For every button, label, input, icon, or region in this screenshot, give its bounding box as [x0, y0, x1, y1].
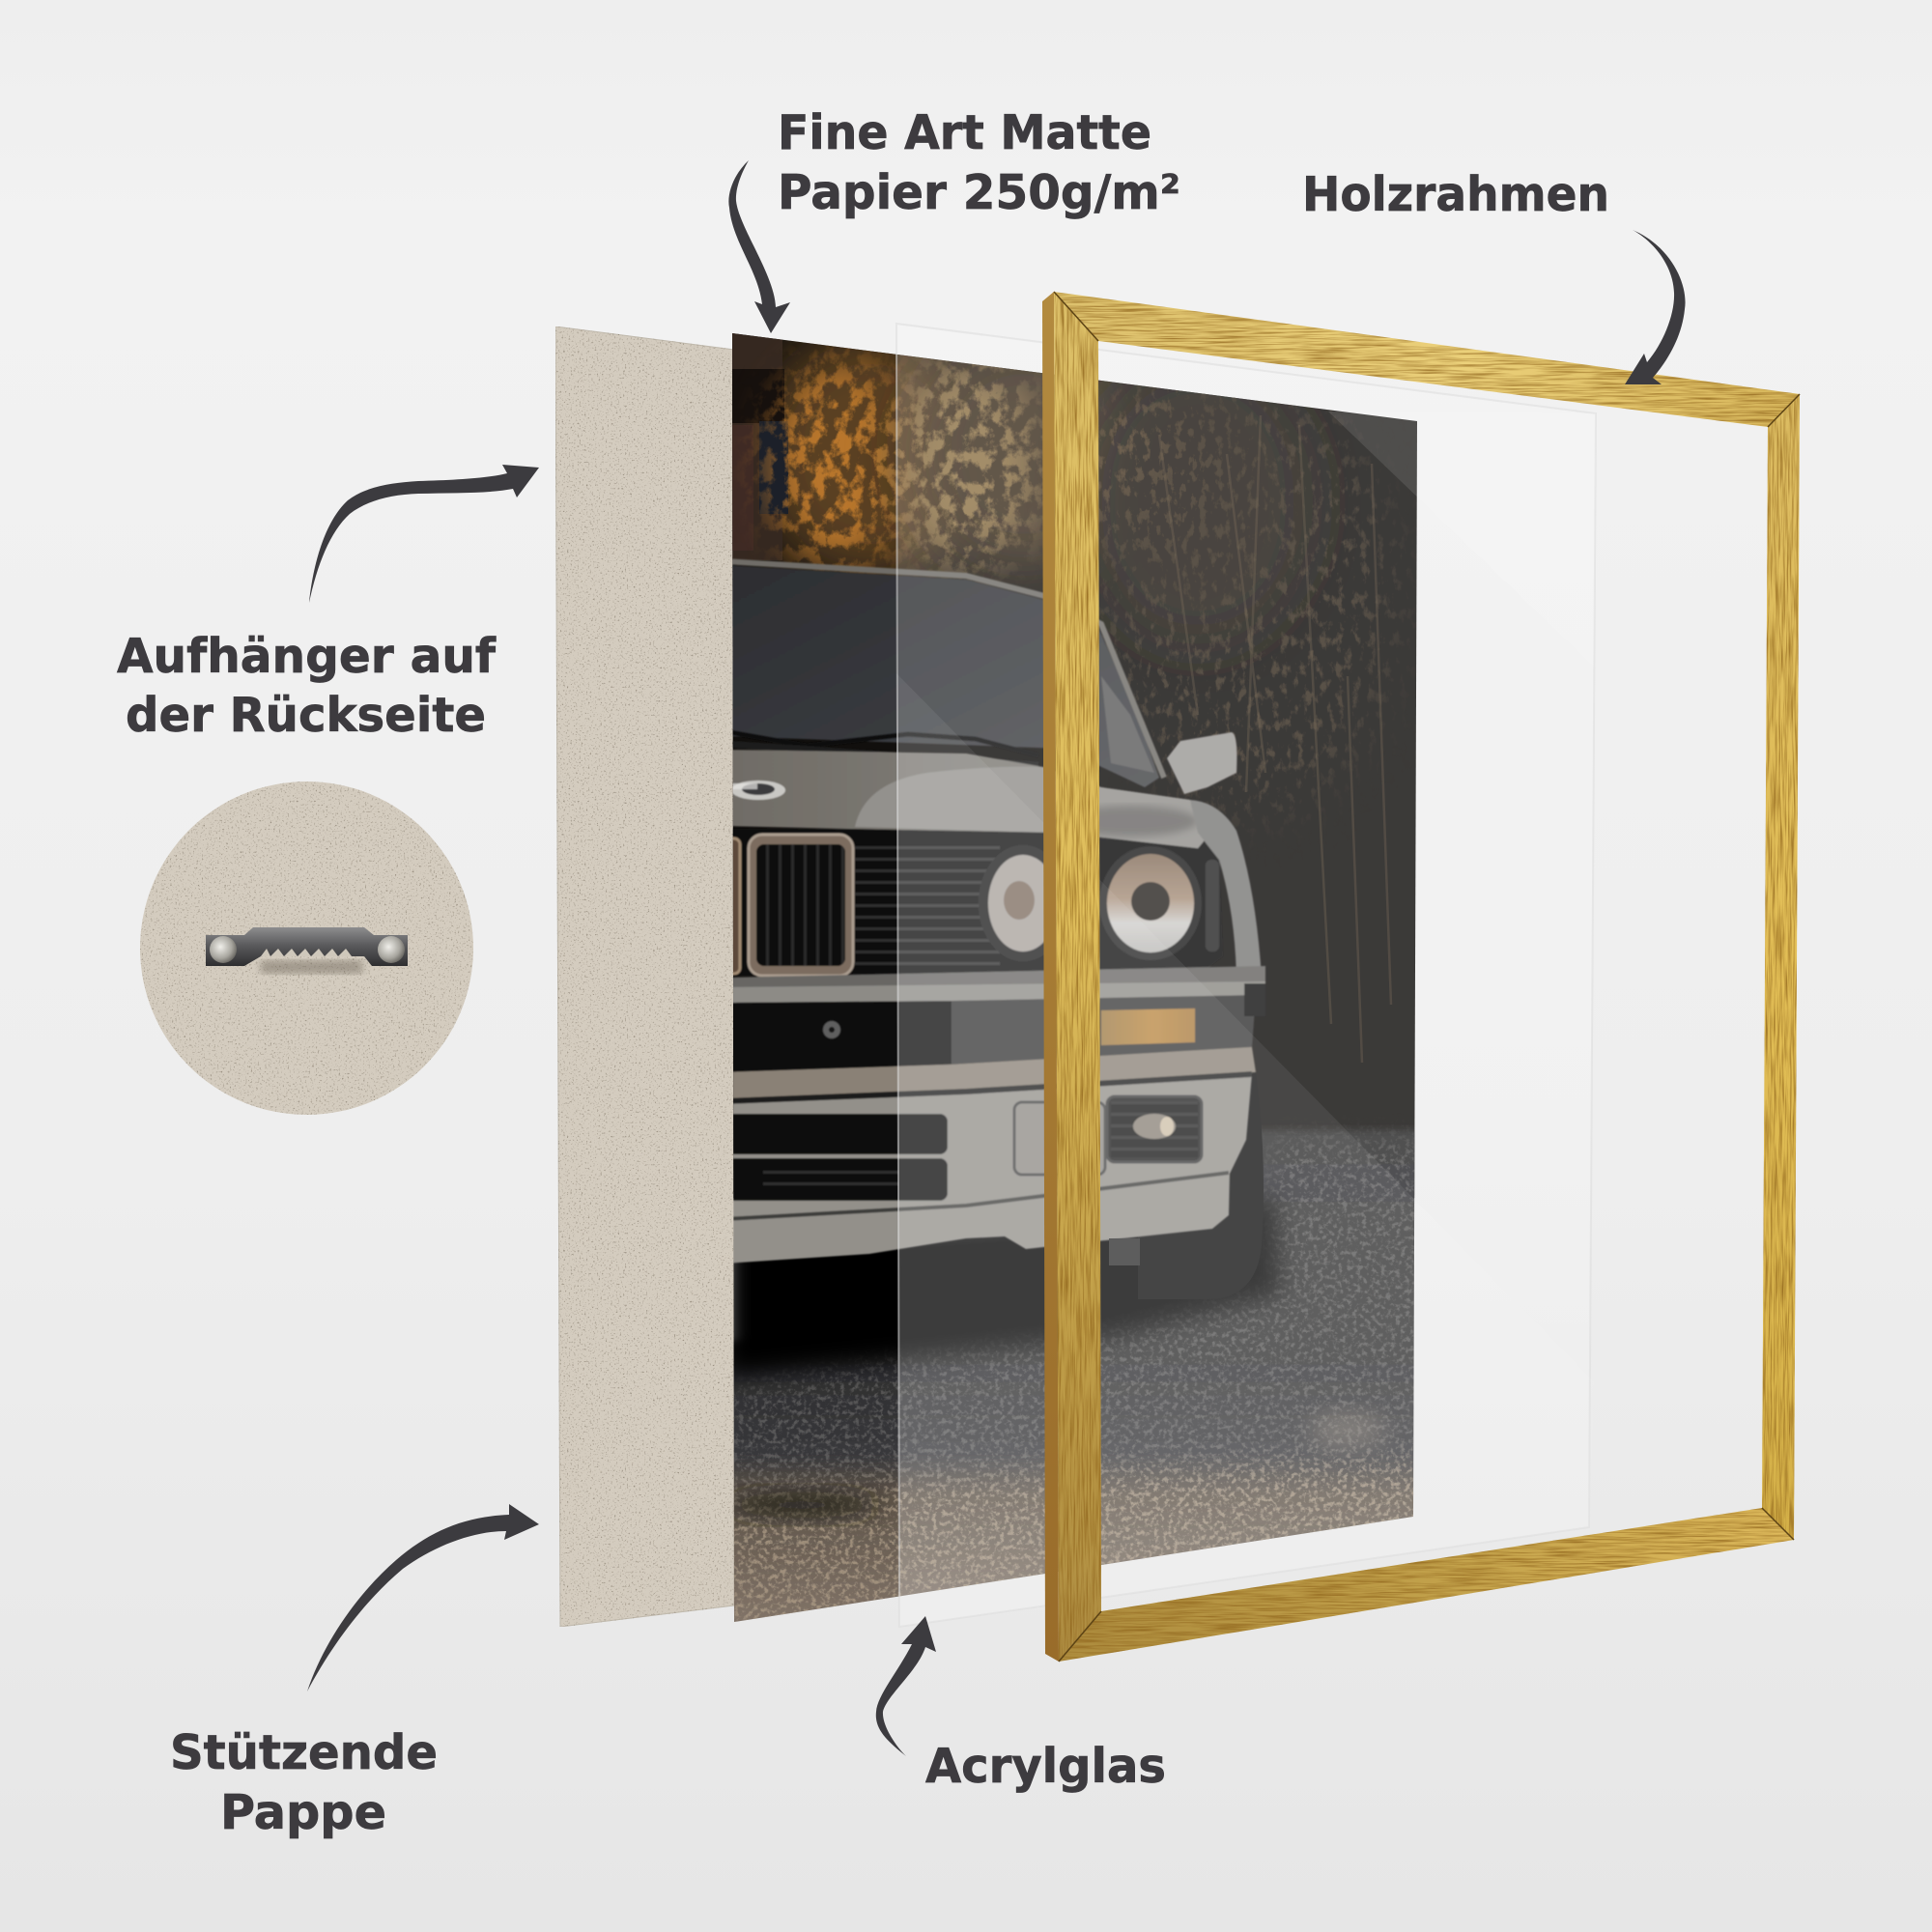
- car: hood: [724, 750, 1208, 848]
- heading: Aufhänger auf der Rückseite: der Rückseite: [126, 688, 486, 743]
- gravel ground: [724, 1130, 1430, 1642]
- car: left kidney grille edge: [732, 836, 743, 976]
- car: black number plate panel: [724, 983, 1265, 1072]
- panel: hanger detail circle: [140, 781, 473, 1115]
- car: fender: [1190, 800, 1262, 987]
- car: plate recess: [1014, 1102, 1105, 1175]
- car: kidney grille: [749, 835, 853, 976]
- frame bottom bar: [1059, 1508, 1794, 1662]
- sawtooth hanger shadow: [261, 960, 362, 974]
- car: inner headlight: [980, 846, 1057, 960]
- frame side face: [1042, 292, 1059, 1662]
- panel: fine art paper poster with car photo: [720, 328, 1430, 1642]
- arrow: to acrylic: [876, 1616, 936, 1756]
- building behind trees: [732, 333, 788, 560]
- glass reflection lower band: [896, 673, 1594, 1627]
- heading: Stützende Pappe: Stützende: [170, 1725, 438, 1780]
- heading: Fine Art Matte Papier: Papier 250g/m²: [778, 165, 1180, 220]
- arrow: to paper: [728, 160, 790, 333]
- panel: gold wooden frame: [1042, 292, 1800, 1662]
- car: orange indicator: [1101, 1009, 1195, 1045]
- frame top bar: [1054, 292, 1800, 427]
- car: chrome bumper strip: [724, 966, 1265, 1005]
- under-car shadow: [724, 1198, 1280, 1377]
- heading: Stützende Pappe: [170, 1725, 438, 1840]
- gravel patch under bumper: [1109, 1238, 1140, 1265]
- car: lower bumper silver: [724, 1074, 1252, 1264]
- arrow: to cardboard: [307, 1504, 539, 1691]
- arrow: to hanger side: [309, 465, 539, 603]
- heading: Fine Art Matte Papier: Fine Art Matte: [778, 105, 1151, 160]
- heading: Aufhänger auf der Rückseite: [117, 629, 497, 743]
- car: BMW badge: [731, 781, 785, 800]
- heading: Acrylglas: Acrylglas: [925, 1739, 1166, 1794]
- cardboard disc: [140, 781, 473, 1115]
- warm underglow behind foliage: [771, 340, 1314, 634]
- car: air intakes: [720, 1114, 948, 1201]
- car: headlight and grille black surround: [724, 829, 1223, 976]
- car: horizontal grille slats: [855, 840, 1000, 971]
- car: upper bumper silver: [724, 1047, 1256, 1099]
- car: side mirror: [1167, 732, 1236, 794]
- bamboo stems: [1159, 415, 1391, 1063]
- car body: [720, 561, 1265, 1264]
- sawtooth hanger plate: [206, 927, 408, 966]
- orange foliage: [771, 362, 1391, 811]
- frame left bar: [1054, 292, 1101, 1662]
- arrow: to frame: [1625, 230, 1686, 384]
- heading: Holzrahmen: Holzrahmen: [1302, 167, 1609, 222]
- heading: Aufhänger auf der Rückseite: Aufhänger auf: [117, 629, 497, 684]
- car: fog lamp: [1107, 1096, 1202, 1162]
- frame right bar: [1762, 394, 1800, 1540]
- heading: Stützende Pappe: Pappe: [220, 1785, 386, 1840]
- photo background: dark trees: [724, 328, 1430, 1198]
- car front wheel: [1138, 1128, 1264, 1299]
- panel: acrylic glass sheet: [896, 324, 1596, 1627]
- car: outer headlight: [1099, 846, 1219, 960]
- heading: Fine Art Matte Papier: [778, 105, 1180, 220]
- panel: supporting cardboard sheet: [555, 327, 734, 1627]
- car: windshield and roof: [724, 561, 1164, 787]
- glass reflection upper corner: [1328, 412, 1596, 667]
